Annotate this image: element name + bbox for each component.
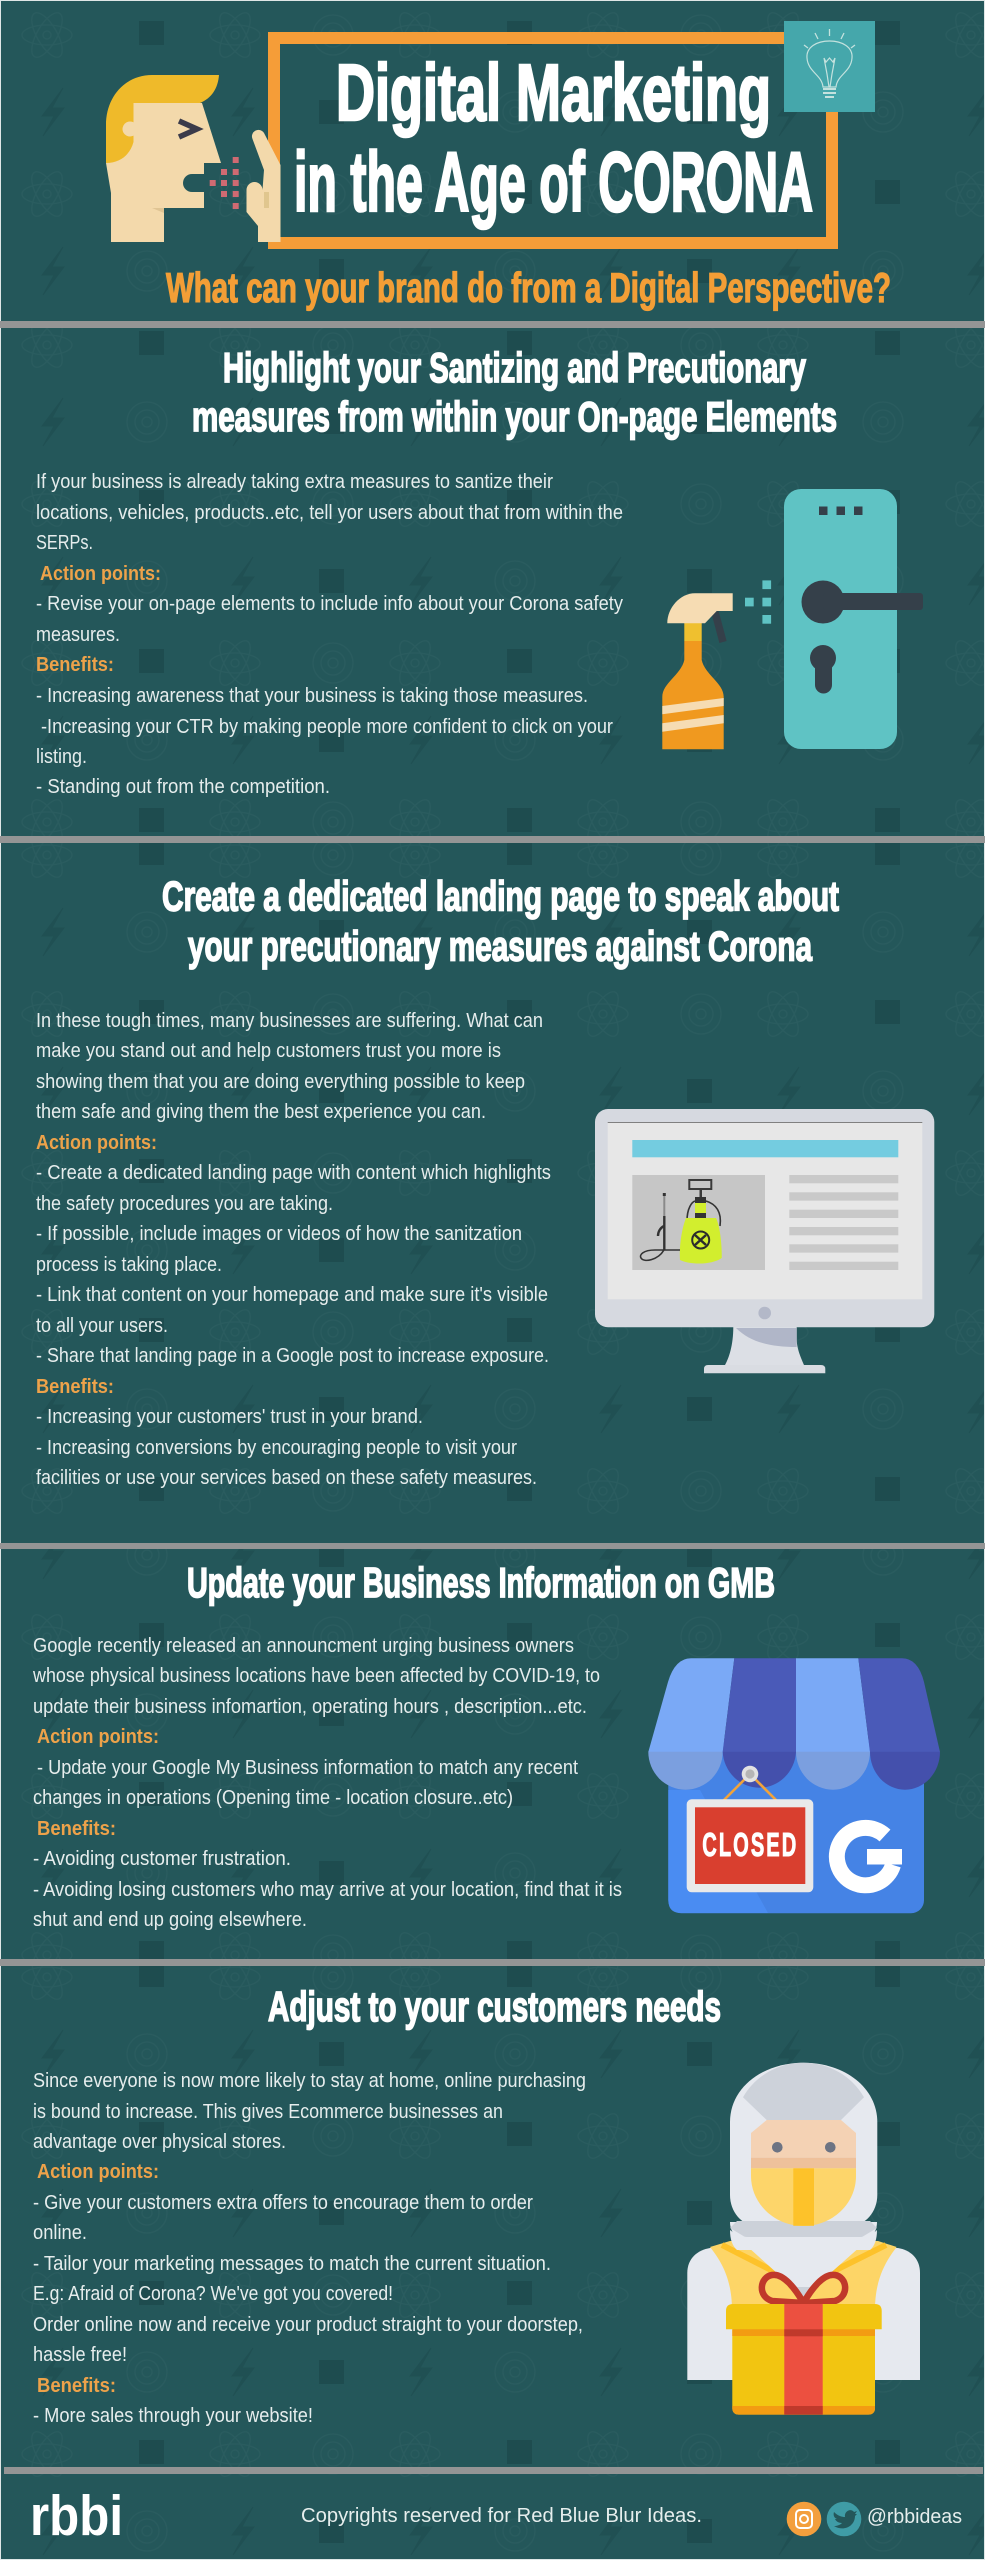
divider (0, 836, 985, 843)
text block: If your business is already taking extra measures to santize their (36, 470, 553, 493)
text block: - Update your Google My Business information to match any recent (37, 1756, 578, 1779)
text block: In these tough times, many businesses are suffering. What can (36, 1009, 543, 1032)
text block: Google recently released an announcment urging business owners (33, 1634, 574, 1657)
text block: changes in operations (Opening time - location closure..etc) (33, 1786, 513, 1809)
title: Digital Marketing (336, 48, 771, 137)
text block (33, 2069, 586, 2427)
text block: - Revise your on-page elements to include info about your Corona safety (36, 592, 624, 615)
icon: gift box (726, 2275, 882, 2415)
text block: - Increasing awareness that your business is taking those measures. (36, 684, 588, 707)
text block: -Increasing your CTR by making people more confident to click on your (41, 715, 613, 738)
text block: facilities or use your services based on these safety measures. (36, 1466, 537, 1489)
title (294, 48, 813, 229)
divider (0, 321, 985, 328)
text block: E.g: Afraid of Corona? We've got you covered! (33, 2282, 393, 2305)
heading: Adjust to your customers needs (268, 1983, 721, 2030)
panel: section 4 customers (33, 1983, 920, 2427)
icon: protective suit person holding gift (687, 2063, 920, 2415)
text block: measures. (36, 623, 120, 646)
text block: Benefits: (36, 1375, 114, 1398)
icon: Google storefront (648, 1658, 940, 1913)
icon: man coughing into hand (106, 75, 280, 242)
text block: - Avoiding losing customers who may arrive at your location, find that it is (33, 1878, 622, 1901)
text block: process is taking place. (36, 1253, 222, 1276)
text block: Benefits: (37, 1817, 116, 1840)
text block (36, 470, 624, 798)
divider (0, 1543, 985, 1549)
text block: whose physical business locations have been affected by COVID-19, to (32, 1664, 600, 1687)
panel: section 3 GMB (32, 1559, 940, 1931)
panel: section 2 landing page (36, 872, 934, 1489)
icon: Google G (837, 1828, 902, 1885)
text block: Action points: (37, 1725, 159, 1748)
title frame (274, 38, 832, 243)
text block: SERPs. (36, 531, 93, 554)
text block: - If possible, include images or videos of how the sanitzation (36, 1222, 522, 1245)
text block: hassle free! (33, 2343, 127, 2366)
text block: update their business infomartion, operating hours , description...etc. (33, 1695, 587, 1718)
text block: Order online now and receive your product straight to your doorstep, (33, 2313, 583, 2336)
text block: - Standing out from the competition. (36, 775, 330, 798)
icon: monitor with landing page (595, 1109, 934, 1373)
text block: listing. (36, 745, 87, 768)
text block: - Increasing conversions by encouraging people to visit your (36, 1436, 517, 1459)
heading (162, 872, 839, 970)
text block: advantage over physical stores. (33, 2130, 286, 2153)
text block: the safety procedures you are taking. (36, 1192, 333, 1215)
social handle: @rbbideas (867, 2506, 962, 2528)
text block: Action points: (36, 1131, 157, 1154)
text block: showing them that you are doing everything possible to keep (36, 1070, 525, 1093)
text block: Benefits: (36, 653, 114, 676)
icon: twitter (827, 2502, 861, 2536)
text block: - Create a dedicated landing page with content which highlights (36, 1161, 551, 1184)
logo: rbbi (30, 2484, 123, 2548)
text block: online. (33, 2221, 87, 2244)
text block: shut and end up going elsewhere. (33, 1908, 307, 1931)
text block: Action points: (37, 2160, 159, 2183)
copyright: Copyrights reserved for Red Blue Blur Ideas. (301, 2505, 702, 2527)
icon: light bulb (784, 21, 875, 112)
text block: - Tailor your marketing messages to match the current situation. (33, 2252, 551, 2275)
text block: - Increasing your customers' trust in your brand. (36, 1405, 423, 1428)
closed sign text: CLOSED (702, 1826, 796, 1863)
text block (32, 1634, 622, 1931)
footer (30, 2484, 962, 2548)
text block: make you stand out and help customers trust you more is (36, 1039, 501, 1062)
panel: section 1 on-page elements (36, 344, 923, 798)
divider (0, 1959, 985, 1966)
text block: - Give your customers extra offers to encourage them to order (33, 2191, 533, 2214)
text block: is bound to increase. This gives Ecommerce businesses an (33, 2100, 503, 2123)
text block: Since everyone is now more likely to stay at home, online purchasing (33, 2069, 586, 2092)
text block: to all your users. (36, 1314, 168, 1337)
icon: pressure sprayer (641, 1180, 722, 1264)
text block: - Avoiding customer frustration. (33, 1847, 291, 1870)
text block: locations, vehicles, products..etc, tell yor users about that from within the (36, 501, 623, 524)
text block: - Share that landing page in a Google post to increase exposure. (36, 1344, 549, 1367)
panel: header (106, 21, 891, 311)
text block: Action points: (40, 562, 161, 585)
icon: door handle and spray bottle (662, 489, 923, 749)
text block: them safe and giving them the best experience you can. (36, 1100, 486, 1123)
text block: Benefits: (37, 2374, 116, 2397)
text block: - More sales through your website! (33, 2404, 313, 2427)
divider (4, 2467, 983, 2474)
heading (192, 344, 837, 440)
text block: - Link that content on your homepage and make sure it's visible (36, 1283, 548, 1306)
text block (36, 1009, 551, 1489)
icon: instagram (787, 2502, 821, 2536)
